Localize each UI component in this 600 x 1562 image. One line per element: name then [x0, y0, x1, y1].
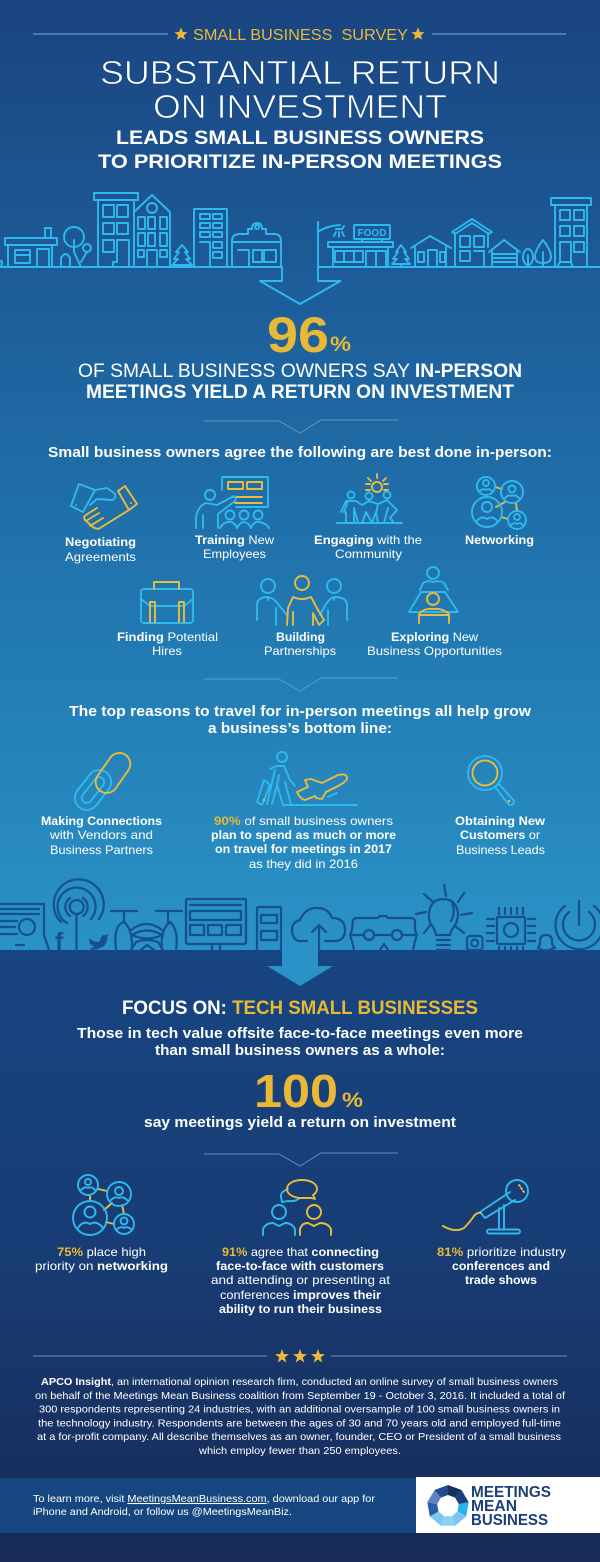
icon: microphone	[443, 1180, 528, 1234]
logo wordmark	[471, 1484, 551, 1529]
text block: methodology: APCO Insight , an international opinion research firm, conducted an online survey of small business owners	[41, 1377, 558, 1388]
text block: methodology	[35, 1377, 565, 1457]
icon: table meeting	[409, 567, 458, 623]
text: 90 percent plan to spend: as they did in 2016	[249, 857, 358, 871]
icon: microchip	[487, 908, 535, 950]
text: 75 percent: priority on networking	[35, 1259, 168, 1273]
text block: methodology: on behalf of the Meetings Mean Business coalition from September 19 - October 3, 2016. It included a total of	[35, 1391, 565, 1402]
subtitle	[98, 127, 502, 173]
eyebrow: small business survey	[33, 27, 566, 44]
icon: smartphone	[257, 907, 281, 950]
FOOD sign: FOOD	[358, 227, 387, 239]
icon: VR headset	[350, 916, 417, 950]
text block: methodology: 300 respondents representing 24 industries, with an additional oversample of 100 small business owners in	[39, 1404, 560, 1416]
footer text	[33, 1493, 376, 1518]
footer text: iPhone and Android, or follow us @MeetingsMeanBiz.	[33, 1506, 292, 1518]
text: 91 percent: face-to-face with customers	[216, 1259, 384, 1273]
label: employees: Employees	[203, 547, 266, 561]
divider: three stars	[33, 1349, 567, 1362]
label: business opportunities: Business Opportunities	[367, 644, 502, 658]
statistic: 96 percent	[267, 307, 351, 363]
text: 81 percent	[437, 1245, 566, 1287]
heading: top reasons to travel	[69, 704, 532, 737]
subtitle: TO PRIORITIZE IN-PERSON MEETINGS	[98, 151, 502, 173]
icon: training	[196, 477, 269, 528]
heading: best done in-person: Small business owners agree the following are best done in-person:	[48, 445, 552, 461]
text block: methodology: at a for-profit company. All describe themselves as an owner, founder, CEO or President of a small business	[37, 1432, 561, 1443]
text: 91 percent: 91% agree that connecting	[222, 1245, 379, 1259]
text: 81 percent: conferences and	[452, 1259, 550, 1273]
icon: conversation	[263, 1180, 331, 1235]
illustration: technology skyline	[0, 879, 600, 956]
icon: twitter bird	[89, 934, 109, 950]
panel: tech small business stats	[35, 1175, 566, 1316]
text: 91 percent: ability to run their business	[219, 1302, 382, 1316]
heading: top reasons to travel: a business’s bottom line:	[208, 721, 392, 737]
icon: magnifying glass	[468, 756, 514, 805]
label: building partnerships: Building	[276, 630, 325, 644]
icon: light bulb	[416, 885, 472, 950]
title: SUBSTANTIAL RETURN	[100, 54, 500, 91]
icon: community	[337, 474, 402, 523]
statistic: 100 percent: %	[342, 1089, 363, 1112]
label: building partnerships	[264, 630, 336, 658]
icon: drone	[111, 911, 182, 950]
icon: partnerships	[257, 576, 347, 625]
label: training new employees: Training New	[195, 533, 274, 547]
label: exploring new: Exploring New	[391, 630, 478, 644]
statistic: 96 percent: %	[330, 333, 351, 356]
logo wordmark: MEETINGS	[471, 1484, 551, 1501]
panel: upper background	[0, 0, 600, 950]
icon: instagram	[467, 936, 482, 950]
left town buildings	[0, 193, 281, 267]
icon: desktop monitor	[186, 899, 246, 950]
label: engaging with the community: Engaging with the	[314, 533, 422, 547]
footer text: To learn more, visit MeetingsMeanBusiness.com , download our app for	[33, 1493, 376, 1505]
text: 90 percent plan to spend: on travel for meetings in 2017	[215, 842, 392, 856]
footer band	[0, 1477, 600, 1533]
text: 91 percent: and attending or presenting at	[211, 1273, 391, 1287]
panel: top reasons	[41, 749, 546, 871]
label: obtaining new customers	[455, 814, 546, 857]
label: making connections: with Vendors and	[49, 828, 153, 842]
statement: in-person ROI: OF SMALL BUSINESS OWNERS SAY IN-PERSON	[78, 361, 522, 382]
label: making connections	[41, 814, 162, 857]
eyebrow: small business survey: SMALL BUSINESS SURVEY	[193, 27, 408, 44]
icon: laptop lens	[19, 919, 35, 935]
icon: handshake	[71, 484, 137, 529]
subheading: offsite meetings	[77, 1026, 523, 1059]
heading: focus on tech small businesses: FOCUS ON: TECH SMALL BUSINESSES	[122, 997, 478, 1019]
title: ON INVESTMENT	[153, 88, 447, 125]
logo wordmark: BUSINESS	[471, 1512, 548, 1529]
text: 91 percent	[211, 1245, 391, 1316]
panel: lower background	[0, 950, 600, 1562]
text: 75 percent: 75% place high	[57, 1245, 146, 1259]
text: 91 percent: conferences improves their	[220, 1288, 381, 1302]
label: hires: Hires	[152, 644, 182, 658]
text: 90 percent plan to spend	[211, 814, 396, 871]
statement: in-person ROI: MEETINGS YIELD A RETURN ON INVESTMENT	[86, 382, 514, 403]
icon: snapchat ghost	[538, 935, 555, 950]
text block: methodology: which employ fewer than 250 employees.	[198, 1446, 401, 1457]
icon: signal tower	[54, 879, 104, 950]
label: networking: Networking	[465, 533, 534, 547]
label: finding potential hires: Finding Potential	[117, 630, 218, 644]
icon: network	[73, 1175, 134, 1235]
subheading: offsite meetings: than small business owners as a whole:	[155, 1043, 445, 1059]
title	[100, 54, 500, 125]
text block: methodology: the technology industry. Respondents are between the ages of 30 and 70 years old and employed full-time	[38, 1418, 561, 1430]
text: 90 percent plan to spend: plan to spend as much or more	[211, 828, 396, 842]
label: making connections: Business Partners	[50, 843, 153, 857]
logo panel	[416, 1477, 600, 1533]
logo mark	[427, 1485, 469, 1526]
text: 90 percent plan to spend: 90% of small business owners	[214, 814, 393, 828]
statement: yield a return: say meetings yield a return on investment	[144, 1115, 456, 1131]
right town buildings	[318, 198, 591, 267]
arrow: tech section	[267, 950, 333, 986]
subheading: offsite meetings: Those in tech value offsite face-to-face meetings even more	[77, 1026, 523, 1042]
statement: in-person ROI	[78, 361, 522, 403]
label: negotiating agreements: Agreements	[65, 550, 136, 564]
icon: networking	[472, 477, 526, 529]
label: making connections: Making Connections	[41, 814, 162, 828]
icon: power symbol	[556, 901, 600, 949]
icon: briefcase	[141, 582, 193, 623]
illustration: town skyline with arrow	[0, 193, 600, 304]
label: obtaining new customers: Customers or	[460, 828, 540, 842]
label: community: Community	[335, 547, 402, 561]
text: 81 percent: trade shows	[465, 1273, 537, 1287]
icon: cloud upload	[292, 908, 345, 950]
logo wordmark: MEAN	[471, 1498, 517, 1515]
icon: facebook: f	[55, 928, 64, 956]
ground line and down arrow	[0, 267, 600, 304]
icon: laptop	[0, 904, 49, 950]
subtitle: LEADS SMALL BUSINESS OWNERS	[116, 127, 484, 149]
label: negotiating agreements: Negotiating	[65, 535, 136, 549]
label: obtaining new customers: Obtaining New	[455, 814, 546, 828]
text: 81 percent: 81% prioritize industry	[437, 1245, 566, 1259]
label: obtaining new customers: Business Leads	[456, 843, 545, 857]
icon: chain link	[70, 749, 135, 815]
statistic: 100 percent: 100	[254, 1065, 338, 1117]
heading: top reasons to travel: The top reasons to travel for in-person meetings all help grow	[69, 704, 532, 720]
icon: traveler and plane	[257, 752, 357, 805]
panel: best done in-person items	[65, 474, 534, 658]
label: negotiating agreements	[65, 535, 136, 564]
label: building partnerships: Partnerships	[264, 644, 336, 658]
icon: VR eyes	[364, 930, 402, 940]
statistic: 96 percent: 96	[267, 307, 329, 363]
text: 75 percent	[35, 1245, 168, 1273]
